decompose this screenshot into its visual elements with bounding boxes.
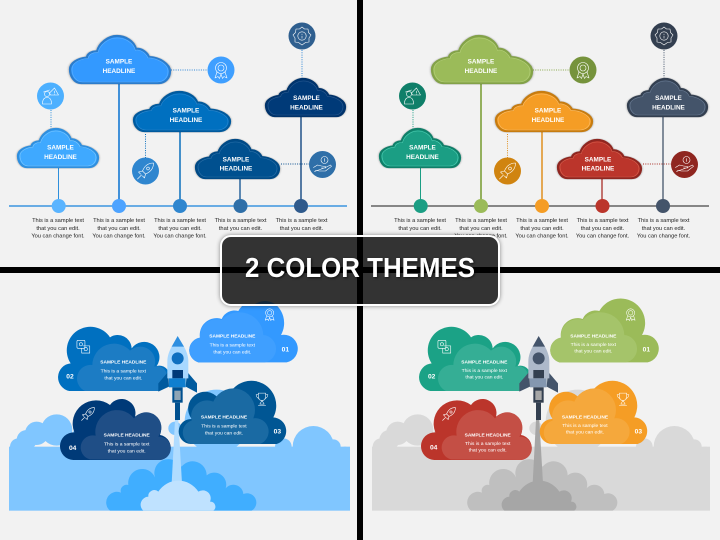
info cloud 03: This is a sample text	[562, 423, 608, 429]
info cloud 03	[179, 381, 286, 444]
timeline captions: This is a sample text	[215, 218, 267, 224]
cloud headlines: SAMPLE	[409, 144, 437, 152]
timeline captions: This is a sample text	[516, 218, 568, 224]
icon: gear badge	[650, 22, 678, 50]
icon: puzzle	[77, 340, 90, 353]
info cloud 02: that you can edit.	[465, 374, 503, 380]
info cloud 01: SAMPLE HEADLINE	[570, 334, 617, 340]
info cloud 01: SAMPLE HEADLINE	[209, 334, 256, 340]
cloud headlines: HEADLINE	[103, 68, 136, 75]
cloud 1	[18, 129, 98, 167]
cloud headlines: HEADLINE	[465, 68, 498, 75]
timeline captions: This is a sample text	[394, 218, 446, 224]
cloud 5	[628, 79, 707, 116]
timeline captions: that you can edit.	[280, 226, 324, 232]
icon: award	[626, 309, 635, 321]
timeline captions: that you can edit.	[97, 226, 141, 232]
cloud 4	[558, 140, 641, 178]
timeline captions: that you can edit.	[642, 226, 686, 232]
connector stems	[58, 83, 301, 206]
timeline captions: You can change font.	[153, 234, 207, 240]
background cloud bank	[372, 390, 710, 511]
cloud headlines: HEADLINE	[220, 166, 253, 172]
icon: person and warning	[37, 82, 64, 110]
info cloud 04: SAMPLE HEADLINE	[465, 432, 512, 438]
info cloud 02: that you can edit.	[104, 376, 142, 382]
timeline captions: that you can edit.	[36, 226, 80, 232]
icon: rocket	[494, 158, 521, 184]
cloud headlines: HEADLINE	[532, 117, 565, 124]
panel: color rocket launch	[372, 299, 710, 511]
timeline nodes	[414, 199, 670, 213]
icon: hand with coin	[309, 151, 336, 178]
info cloud 04: SAMPLE HEADLINE	[104, 432, 151, 438]
panel: blue rocket launch	[9, 299, 350, 511]
info cloud 03	[540, 381, 647, 444]
cloud headlines: HEADLINE	[582, 166, 615, 172]
timeline captions: You can change font.	[454, 234, 508, 240]
icon: rocket	[443, 408, 455, 420]
timeline captions: that you can edit.	[158, 226, 202, 232]
info cloud 04: that you can edit.	[108, 449, 146, 455]
info cloud 02: SAMPLE HEADLINE	[100, 359, 147, 365]
info cloud 01: This is a sample text	[210, 343, 256, 349]
cloud 2	[432, 36, 532, 83]
info cloud 03: 03	[635, 428, 642, 435]
timeline axis	[371, 205, 709, 207]
info cloud 02: SAMPLE HEADLINE	[461, 359, 508, 365]
info cloud 01: that you can edit.	[574, 348, 612, 354]
timeline captions: that you can edit.	[459, 226, 503, 232]
cloud headlines: SAMPLE	[585, 156, 612, 164]
timeline captions: You can change font.	[92, 234, 146, 240]
info cloud 02: 02	[66, 374, 74, 381]
info cloud 03: that you can edit.	[566, 429, 604, 435]
info cloud 04: 04	[69, 445, 77, 452]
info cloud 01	[189, 299, 298, 362]
cloud headlines: SAMPLE	[293, 95, 321, 102]
icon: hand with coin	[671, 151, 698, 178]
info cloud 01: that you can edit.	[213, 350, 251, 356]
icon: award	[208, 56, 234, 84]
timeline captions: This is a sample text	[577, 218, 629, 224]
exhaust cloud, mid	[467, 459, 617, 511]
banner: 2 color themes	[221, 236, 499, 305]
cloud headlines: SAMPLE	[47, 144, 75, 152]
rocket exhaust beam	[172, 420, 182, 483]
info cloud 01: This is a sample text	[571, 342, 617, 348]
cloud headlines: HEADLINE	[170, 117, 203, 124]
exhaust cloud, dark	[502, 481, 576, 511]
info cloud 01	[550, 299, 659, 362]
timeline captions: that you can edit.	[398, 226, 442, 232]
cloud headlines: SAMPLE	[535, 108, 562, 114]
icon: gear badge	[288, 22, 316, 50]
timeline captions: This is a sample text	[93, 218, 145, 224]
info cloud 02	[419, 327, 530, 391]
panel: color cloud timeline	[371, 22, 709, 240]
rocket	[158, 336, 197, 420]
cloud 4	[196, 140, 279, 178]
timeline captions: that you can edit.	[581, 226, 625, 232]
info cloud 04: that you can edit.	[469, 447, 507, 453]
cloud headlines: SAMPLE	[468, 58, 495, 66]
info cloud 02: This is a sample text	[101, 369, 147, 375]
timeline captions: You can change font.	[515, 234, 569, 240]
rocket	[519, 336, 558, 420]
cloud headlines: HEADLINE	[406, 154, 440, 161]
icon: person and warning	[399, 82, 426, 110]
timeline axis	[9, 205, 347, 207]
panel: blue cloud timeline	[9, 22, 347, 240]
cloud 5	[266, 79, 345, 116]
timeline captions: that you can edit.	[219, 226, 263, 232]
banner: 2 color themes: 2 COLOR THEMES	[245, 252, 475, 283]
cloud 3	[134, 92, 230, 131]
timeline captions: This is a sample text	[638, 218, 690, 224]
info cloud 04: This is a sample text	[104, 442, 150, 448]
info cloud 01: 01	[282, 347, 289, 354]
timeline captions	[394, 218, 691, 240]
timeline captions: You can change font.	[637, 234, 691, 240]
cloud 2	[70, 36, 170, 83]
icon: award	[570, 56, 596, 84]
panel: color timeline background	[363, 0, 720, 267]
connector stems	[420, 83, 663, 206]
timeline captions: This is a sample text	[154, 218, 206, 224]
info cloud 02: This is a sample text	[462, 368, 508, 374]
exhaust cloud, mid	[106, 459, 256, 511]
info cloud 03: SAMPLE HEADLINE	[201, 414, 248, 420]
dotted connectors	[51, 50, 309, 164]
rocket exhaust beam	[533, 420, 543, 483]
icon: trophy	[617, 393, 629, 405]
timeline captions: This is a sample text	[455, 218, 507, 224]
info cloud 04	[421, 399, 532, 460]
cloud headlines: SAMPLE	[106, 58, 133, 66]
background cloud bank	[9, 390, 350, 511]
info cloud 04: 04	[430, 445, 438, 452]
timeline captions: This is a sample text	[276, 218, 328, 224]
cloud headlines: HEADLINE	[44, 154, 78, 161]
timeline captions: You can change font.	[576, 234, 630, 240]
info cloud 02: 02	[428, 373, 436, 380]
exhaust cloud, light	[141, 481, 215, 511]
timeline captions: You can change font.	[31, 234, 85, 240]
info cloud 02	[58, 327, 169, 391]
timeline captions: This is a sample text	[32, 218, 84, 224]
info cloud 03: This is a sample text	[201, 424, 247, 430]
cloud headlines: HEADLINE	[290, 104, 324, 112]
icon: rocket	[82, 408, 94, 420]
cloud headlines	[44, 58, 324, 172]
cloud 1	[380, 129, 460, 167]
timeline captions	[31, 218, 328, 240]
cloud headlines: HEADLINE	[652, 104, 686, 112]
cloud headlines: SAMPLE	[223, 156, 250, 164]
cloud headlines	[406, 58, 686, 172]
info cloud 01: 01	[643, 347, 650, 354]
info cloud 03: SAMPLE HEADLINE	[562, 414, 609, 420]
info cloud 03: that you can edit.	[205, 431, 243, 437]
panel: color rocket background	[363, 273, 720, 540]
panel: blue timeline background	[0, 0, 357, 267]
icon: puzzle	[438, 340, 451, 353]
info cloud 04	[60, 399, 171, 460]
timeline nodes	[52, 199, 308, 213]
info cloud 03: 03	[274, 429, 281, 436]
cloud headlines: SAMPLE	[173, 108, 200, 114]
timeline captions: that you can edit.	[520, 226, 564, 232]
icon: trophy	[256, 393, 268, 405]
icon: rocket	[132, 158, 159, 184]
cloud headlines: SAMPLE	[655, 95, 683, 102]
info cloud 04: This is a sample text	[465, 441, 511, 447]
dotted connectors	[413, 50, 671, 164]
panel: blue rocket background	[0, 273, 357, 540]
icon: award	[265, 309, 274, 321]
cloud 3	[496, 92, 592, 131]
